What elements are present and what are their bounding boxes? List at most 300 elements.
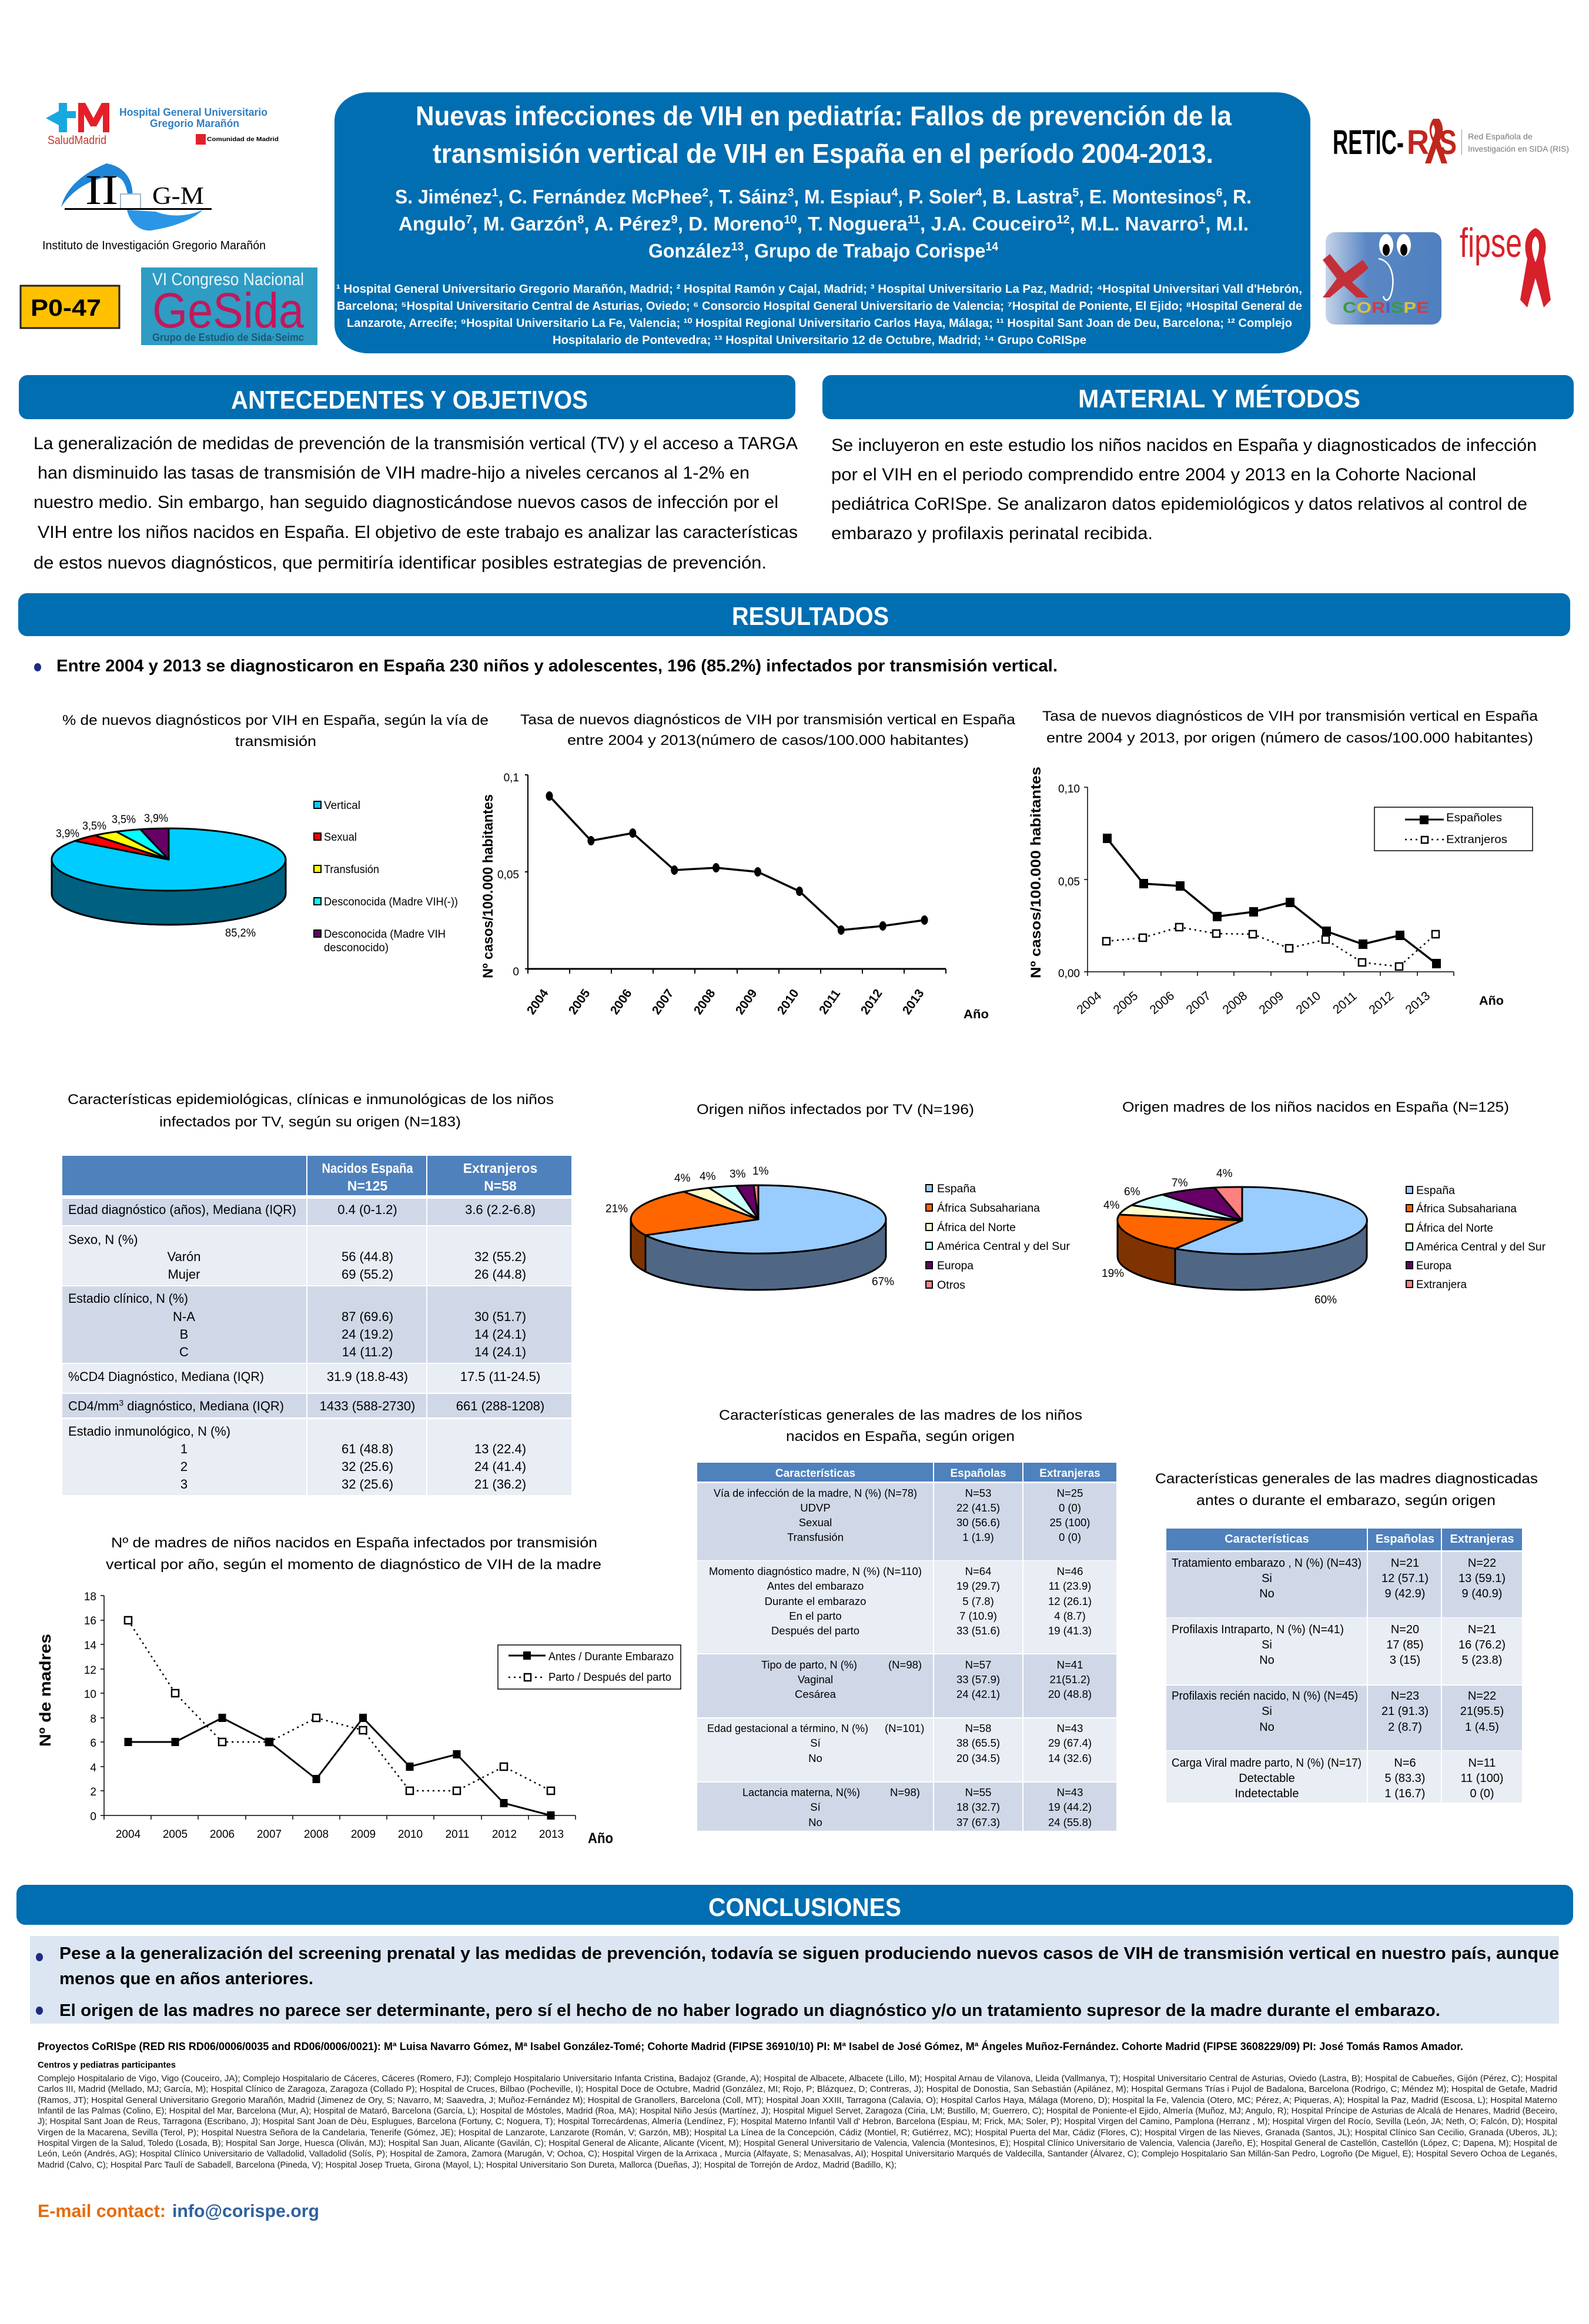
row: momento diagnóstico: 19 (41.3): [1048, 1624, 1092, 1637]
list of centres: Complejo Hospitalario de Vigo, Vigo (Couceiro, JA); Complejo Hospitalario de Cáceres, Cáceres (Romero, FJ); Complejo Hospitalario Universitario Infanta Cristina, Badajoz (Grande, A); Hospital de Albacete, Albacete (Lillo, M); Hospital Arnau de Vilanova, Lleida (Vallmanya, T); Hospital Universitario Central de Asturias, Oviedo (Lastra, B); Hospital de Cabueñes, Gijón (Pérez, C); Hospital: [38, 2074, 1557, 2084]
row: profilaxis intraparto: No: [1259, 1654, 1274, 1667]
table title: Características generales de las madres diagnosticadas: [1155, 1471, 1538, 1487]
row: lactancia materna: 18 (32.7): [956, 1801, 1000, 1813]
authors: 7: [466, 213, 472, 226]
x axis labels: 2009: [733, 987, 760, 1017]
row: tipo de parto: Cesárea: [795, 1688, 837, 1700]
row: momento diagnóstico: 4 (8.7): [1054, 1610, 1086, 1622]
row: profilaxis recién nacido: 2 (8.7): [1388, 1721, 1422, 1734]
row: profilaxis intraparto: 3 (15): [1390, 1654, 1420, 1667]
row: CD4/mm3: CD4/mm: [68, 1399, 119, 1413]
x axis labels: 2004: [116, 1828, 141, 1841]
row: momento diagnóstico: Durante el embarazo: [765, 1595, 866, 1607]
logo: Instituto de Investigación Gregorio Marañón: [42, 163, 266, 252]
table header: Extranjeras: [1450, 1533, 1514, 1546]
row: tipo de parto: 24 (42.1): [956, 1688, 1000, 1700]
logo: Hospital Gregorio Marañón: Comunidad de Madrid: [207, 136, 279, 143]
row: sexo: [62, 1226, 571, 1285]
x axis labels: 2008: [1220, 989, 1250, 1017]
pie value labels: 19%: [1102, 1268, 1124, 1280]
row: tipo de parto: 33 (57.9): [956, 1673, 1000, 1686]
x axis labels: 2007: [257, 1828, 282, 1841]
row: momento diagnóstico: 19 (29.7): [956, 1580, 1000, 1592]
authors: , T. Sáinz: [708, 186, 788, 208]
table: características de los niños: [62, 1092, 571, 1495]
y axis labels: 6: [90, 1737, 96, 1750]
row: tratamiento embarazo: 9 (40.9): [1462, 1587, 1502, 1600]
row: edad diagnóstico: 3.6 (2.2-6.8): [465, 1202, 536, 1217]
text block: antecedentes: VIH entre los niños nacidos en España. El objetivo de este trabajo es analizar las características: [38, 523, 798, 542]
row: vía de infección: 1 (1.9): [962, 1531, 994, 1543]
text block: antecedentes: han disminuido las tasas de transmisión de VIH madre-hijo a niveles cercanos al 1-2% en: [38, 463, 750, 483]
table title: Características epidemiológicas, clínicas e inmunológicas de los niños: [68, 1092, 554, 1108]
section heading: Material y métodos: MATERIAL Y MÉTODOS: [1078, 384, 1360, 413]
row: vía de infección: 22 (41.5): [956, 1502, 1000, 1514]
x axis labels: 2006: [210, 1828, 235, 1841]
row: vía de infección: [697, 1483, 1116, 1560]
authors: 14: [985, 240, 999, 253]
series: Antes / Durante Embarazo: [125, 1714, 555, 1820]
row: CD4/mm3: 3: [119, 1398, 123, 1407]
row: lactancia materna: 24 (55.8): [1048, 1816, 1092, 1828]
table title: antes o durante el embarazo, según origen: [1196, 1493, 1496, 1509]
authors: , P. Soler: [898, 186, 976, 208]
x axis labels: 2008: [691, 987, 718, 1017]
table header: [62, 1156, 571, 1195]
row: carga viral: Indetectable: [1235, 1787, 1299, 1800]
row: sexo: 32 (55.2): [474, 1249, 526, 1264]
text block: antecedentes: de estos nuevos diagnósticos, que permitiría identificar posibles estrategias de prevención.: [34, 553, 767, 573]
contact e-mail: E-mail contact:: [38, 2201, 166, 2221]
row: sexo: 56 (44.8): [342, 1249, 393, 1264]
row: momento diagnóstico: 11 (23.9): [1049, 1580, 1091, 1592]
chart title: transmisión: [235, 734, 316, 750]
x axis labels: [116, 1828, 564, 1841]
row: sexo: Mujer: [168, 1267, 200, 1282]
row: tratamiento embarazo: Tratamiento embarazo , N (%) (N=43): [1172, 1557, 1361, 1570]
row: profilaxis recién nacido: Profilaxis recién nacido, N (%) (N=45): [1172, 1690, 1358, 1703]
row: estadio inmunológico: 1: [180, 1442, 188, 1456]
logo: Hospital Gregorio Marañón: Hospital General Universitario: [119, 106, 267, 118]
chart title: entre 2004 y 2013, por origen (número de casos/100.000 habitantes): [1046, 730, 1533, 746]
row: estadio clínico: [62, 1286, 571, 1363]
table title: [1155, 1471, 1538, 1509]
row: profilaxis intraparto: Profilaxis Intraparto, N (%) (N=41): [1172, 1623, 1344, 1636]
list of centres: (Ramos, JT); Hospital General Universitario Gregorio Marañón, Madrid (Jimenez de Ory, S; Navarro, M; Saavedra, J; Muñoz-Fernández M); Hospital de Granollers, Barcelona (Coll, MT); Hospital Joan XXIII, Tarragona (Calavia, O); Hospital Carlos Haya, Málaga (Moreno, D); Hospital la Fe, Valencia (Otero, MC; Pérez, A; Piqueras, A); Hospital la Paz, Madrid (Escosa, L); Hospital Materno: [38, 2095, 1557, 2105]
row: tratamiento embarazo: [1166, 1552, 1522, 1617]
pie value labels: 4%: [1103, 1199, 1120, 1212]
row: carga viral: 0 (0): [1470, 1787, 1494, 1800]
y axis labels: 0: [90, 1811, 96, 1823]
poster code badge: [21, 286, 119, 328]
logo: CoRISpe: [1323, 232, 1441, 325]
row: estadio inmunológico: 61 (48.8): [342, 1442, 393, 1456]
row: porcentaje CD4: %CD4 Diagnóstico, Mediana (IQR): [68, 1369, 264, 1384]
pie legend: América Central y del Sur: [1416, 1241, 1546, 1253]
list of centres: J); Hospital Sant Joan de Reus, Tarragona (Escribano, J); Hospital Sant Joan de Dèu, Esplugues, Barcelona (Fortuny, C; Noguera, T); Hospital Torrecárdenas, Almería (Lendínez, F); Hospital Materno Infantil Vall d' Hebron, Barcelona (Espiau, M; Frick, MA; Soler, P); Hospital Virgen del Camino, Pamplona (Herranz , M); Hospital Virgen del Rocío, Sevilla (León, JA; Neth, O; Falcón, D); Hospital: [38, 2116, 1557, 2126]
x axis labels: [524, 987, 926, 1017]
pie legend: Transfusión: [324, 864, 379, 876]
pie legend: España: [1416, 1185, 1455, 1197]
pie legend: África Subsahariana: [1416, 1203, 1517, 1215]
panel: conclusiones: [30, 1936, 1559, 2024]
y axis labels: 16: [84, 1615, 96, 1627]
row: profilaxis intraparto: 17 (85): [1386, 1638, 1424, 1651]
x axis labels: 2006: [608, 987, 634, 1017]
conclusion 1: menos que en años anteriores.: [59, 1969, 313, 1988]
row: edad gestacional: Edad gestacional a término, N (%): [707, 1722, 868, 1734]
row: momento diagnóstico: N=64: [965, 1565, 991, 1577]
logo: RETIC-RIS: [1333, 119, 1569, 163]
row: profilaxis recién nacido: Si: [1262, 1705, 1272, 1718]
pie chart: vía de transmisión: [52, 713, 489, 954]
row: profilaxis recién nacido: 1 (4.5): [1465, 1721, 1499, 1734]
logo: fipse: fipse: [1460, 220, 1522, 266]
row: tratamiento embarazo: 13 (59.1): [1458, 1572, 1506, 1585]
row: lactancia materna: Sí: [810, 1801, 821, 1813]
row: estadio inmunológico: 24 (41.4): [474, 1459, 526, 1474]
y axis labels: 0,00: [1058, 968, 1080, 980]
legend: Extranjeros: [1446, 834, 1507, 846]
y axis labels: 14: [84, 1640, 96, 1652]
row: vía de infección: N=53: [965, 1487, 991, 1499]
row: estadio clínico: Estadio clínico, N (%): [68, 1291, 188, 1306]
row: sexo: Varón: [167, 1249, 201, 1264]
x axis labels: 2013: [539, 1828, 564, 1841]
x axis labels: 2013: [1403, 989, 1433, 1017]
list of centres: León, León (Andrés, AG); Hospital Clínico Universitario de Valladolid, Valladolid (Solís, P); Hospital de Zamora, Zamora (Marugán, V; Ochoa, C); Hospital Virgen de la Arrixaca , Murcia (Alfayate, S; Menasalvas, AI); Hospital Universitario Marqués de Valdecilla, Santander (Álvarez, C); Complejo Hospitalario San Millán-San Pedro, Logroño (De Miguel, E); Hospital Severo Ochoa de Leganés,: [38, 2149, 1557, 2159]
list of centres: Carlos III, Madrid (Mellado, MJ; García, M); Hospital Clínico de Zaragoza, Zaragoza (Collado P); Hospital de Cruces, Bilbao (Pocheville, I); Hospital Doce de Octubre, Madrid (González, MI; Rojo, P; Blázquez, D; Contreras, J); Hospital de Donostia, San Sebastián (Apilánez, M); Hospital Germans Trías i Pujol de Badalona, Barcelona (Rodrigo, C; Méndez M); Hospital de Getafe, Madrid: [38, 2084, 1557, 2094]
pie chart: origen madres: [1102, 1099, 1546, 1306]
pie value labels: 3,5%: [112, 814, 136, 826]
pie value labels: 21%: [606, 1203, 628, 1215]
authors: , J.A. Couceiro: [920, 213, 1056, 235]
row: tipo de parto: N=57: [965, 1658, 991, 1671]
pie value labels: 6%: [1124, 1186, 1140, 1198]
axes: [525, 775, 946, 974]
row: momento diagnóstico: Momento diagnóstico madre, N (%) (N=110): [709, 1565, 922, 1577]
legend: Españoles: [1446, 812, 1502, 824]
affiliations: [336, 283, 1302, 347]
section heading: Antecedentes y objetivos: ANTECEDENTES Y OBJETIVOS: [231, 386, 588, 414]
text block: material y métodos: embarazo y profilaxis perinatal recibida.: [831, 524, 1153, 543]
row: momento diagnóstico: N=46: [1057, 1565, 1083, 1577]
logo: RETIC-RIS: RETIC-: [1333, 123, 1404, 162]
authors: , B. Lastra: [982, 186, 1073, 208]
row: edad diagnóstico: 0.4 (0-1.2): [337, 1202, 397, 1217]
row: carga viral: 11 (100): [1460, 1772, 1504, 1785]
series: Extranjeros: [1103, 924, 1439, 970]
logo: Hospital Gregorio Marañón: SaludMadrid: [48, 134, 106, 147]
row: momento diagnóstico: 7 (10.9): [959, 1610, 997, 1622]
table header: Extranjeros: [463, 1161, 537, 1176]
x axis labels: 2005: [1111, 989, 1140, 1017]
pie value labels: [56, 812, 256, 939]
row: tratamiento embarazo: 12 (57.1): [1381, 1572, 1429, 1585]
pie legend: Vertical: [324, 800, 360, 812]
participating centres: Centros y pediatras participantes: [38, 2060, 176, 2070]
authors: 5: [1072, 186, 1079, 199]
authors: S. Jiménez: [395, 186, 496, 208]
authors: , A. Pérez: [584, 213, 671, 235]
funding line: Proyectos CoRISpe (RED RIS RD06/0006/0035 and RD06/0006/0021): Mª Luisa Navarro Gómez, Mª Isabel González-Tomé; Cohorte Madrid (FIPSE 36910/10) PI: Mª Isabel de José Gómez, Mª Ángeles Muñoz-Fernández. Cohorte Madrid (FIPSE 3608229/09) PI: José Tomás Ramos Amador.: [38, 2040, 1463, 2052]
y axis labels: 18: [84, 1591, 96, 1603]
row: vía de infección: 25 (100): [1050, 1516, 1090, 1529]
row: edad gestacional: 29 (67.4): [1048, 1737, 1092, 1749]
row: profilaxis intraparto: 5 (23.8): [1462, 1654, 1502, 1667]
authors: 8: [577, 213, 584, 226]
section heading: Resultados: [18, 593, 1570, 636]
text block: material y métodos: Se incluyeron en este estudio los niños nacidos en España y diagnosticados de infección: [831, 436, 1537, 455]
authors: , M. Espiau: [794, 186, 892, 208]
pie value labels: 3,9%: [56, 828, 79, 840]
logo: VI Congreso Nacional GeSida: VI Congreso Nacional: [152, 270, 304, 289]
y axis labels: 0,10: [1058, 783, 1080, 795]
pie legend: África Subsahariana: [937, 1202, 1040, 1215]
pie legend: Sexual: [324, 831, 357, 844]
section heading: Conclusiones: [16, 1885, 1573, 1925]
pie legend: Otros: [937, 1279, 965, 1292]
row: tipo de parto: N=41: [1057, 1658, 1083, 1671]
pie legend: Europa: [937, 1260, 974, 1272]
row: sexo: 69 (55.2): [342, 1267, 393, 1282]
row: estadio clínico: 24 (19.2): [342, 1327, 393, 1342]
table header: Españolas: [1376, 1533, 1434, 1546]
y axis labels: 0,05: [497, 869, 519, 881]
row: edad gestacional: 14 (32.6): [1048, 1752, 1092, 1764]
x axis labels: 2004: [1075, 989, 1104, 1017]
row: carga viral: 5 (83.3): [1385, 1772, 1425, 1785]
x axis labels: 2010: [1294, 989, 1323, 1017]
pie value labels: 60%: [1314, 1294, 1337, 1306]
authors: , E. Montesinos: [1079, 186, 1216, 208]
pie slices: [1118, 1187, 1367, 1290]
section heading: Resultados: RESULTADOS: [732, 602, 889, 631]
pie legend: América Central y del Sur: [937, 1240, 1071, 1253]
legend: [498, 1645, 681, 1689]
row: edad gestacional: 38 (65.5): [956, 1737, 1000, 1749]
x axis labels: 2011: [1330, 989, 1360, 1016]
contact e-mail: info@corispe.org: [172, 2201, 319, 2221]
row: estadio inmunológico: 21 (36.2): [474, 1477, 526, 1492]
pie legend: Desconocida (Madre VIH(-)): [324, 896, 458, 908]
text block: material y métodos: pediátrica CoRISpe. Se analizaron datos epidemiológicos y datos relativos al control de: [831, 494, 1527, 514]
pie value labels: 4%: [1216, 1168, 1233, 1180]
affiliations: Hospitalario de Pontevedra; ¹³ Hospital Universitario 12 de Octubre, Madrid; ¹⁴ Grupo CoRISpe: [553, 334, 1086, 347]
logo: Hospital Gregorio Marañón: [46, 103, 279, 147]
row: tipo de parto: 20 (48.8): [1048, 1688, 1092, 1700]
x axis labels: 2004: [524, 987, 551, 1017]
x axis labels: 2012: [858, 987, 885, 1017]
pie value labels: [1102, 1168, 1337, 1306]
row: estadio clínico: N-A: [173, 1309, 195, 1324]
header panel: title, authors, affiliations: [334, 92, 1310, 353]
chart title: [106, 1535, 601, 1573]
row: carga viral: 1 (16.7): [1385, 1787, 1425, 1800]
contact e-mail: [38, 2201, 319, 2221]
x axis labels: 2013: [900, 987, 926, 1017]
y axis labels: 0: [513, 966, 519, 978]
row: estadio clínico: 30 (51.7): [474, 1309, 526, 1324]
list of centres: Hospital Virgen de la Salud, Toledo (Losada, B); Hospital San Jorge, Huesca (Oliván, MJ); Hospital San Juan, Alicante (Gavilán, C); Hospital General de Alicante, Alicante (Vicent, M); Hospital General Universitario de Valencia, Valencia (Montesinos, E); Hospital Clínico Universitario de Valencia, Valencia (Jareño, E); Hospital General de Castellón, Castellón (López, C; Dapena, M); Hospital de: [38, 2138, 1557, 2148]
logo: Instituto de Investigación Gregorio Marañón: Instituto de Investigación Gregorio Marañón: [42, 239, 266, 252]
table header: N=58: [484, 1178, 517, 1193]
y axis labels: 10: [84, 1688, 96, 1701]
y axis title: Nº casos/100.000 habitantes: [480, 794, 496, 978]
y axis labels: 0,05: [1058, 876, 1080, 888]
affiliations: Lanzarote, Arrecife; ⁹Hospital Universitario La Fe, Valencia; ¹⁰ Hospital Regional Universitario Carlos Haya, Málaga; ¹¹ Hospital Sant Joan de Deu, Barcelona; ¹² Complejo: [347, 317, 1292, 330]
pie slices: [631, 1185, 886, 1290]
x axis labels: 2005: [566, 987, 593, 1017]
series: Españoles: [1103, 834, 1441, 968]
y axis labels: 2: [90, 1786, 96, 1798]
row: tratamiento embarazo: No: [1259, 1587, 1274, 1600]
logo: RETIC-RIS: R: [1407, 123, 1429, 162]
logo: CoRISpe: CORISPE: [1343, 299, 1429, 316]
pie legend: Desconocida (Madre VIH: [324, 928, 446, 941]
y axis labels: 8: [90, 1713, 96, 1726]
row: edad gestacional: Sí: [810, 1737, 821, 1749]
row: lactancia materna: N=55: [965, 1786, 991, 1798]
table title: [68, 1092, 554, 1130]
authors: González: [648, 240, 734, 262]
pie chart: origen niños: [606, 1102, 1071, 1292]
row: tratamiento embarazo: N=21: [1391, 1557, 1419, 1570]
title: transmisión vertical de VIH en España en el período 2004-2013.: [433, 138, 1213, 169]
x axis labels: [1075, 989, 1433, 1017]
text block: material y métodos: por el VIH en el periodo comprendido entre 2004 y 2013 en la Cohorte Nacional: [831, 465, 1476, 484]
logo: RETIC-RIS: S: [1439, 123, 1457, 162]
row: sexo: Sexo, N (%): [68, 1232, 138, 1247]
row: porcentaje CD4: [62, 1364, 571, 1393]
x axis labels: 2012: [1367, 989, 1396, 1017]
logo: fipse: [1460, 220, 1551, 307]
row: carga viral: N=6: [1394, 1757, 1416, 1770]
authors: , R.: [1222, 186, 1252, 208]
row: momento diagnóstico: 5 (7.8): [962, 1595, 994, 1607]
y axis labels: [84, 1591, 96, 1823]
logo: VI Congreso Nacional GeSida: Grupo de Estudio de Sida·Seimc: [152, 332, 304, 343]
row: edad diagnóstico: Edad diagnóstico (años), Mediana (IQR): [68, 1202, 296, 1217]
row: estadio clínico: C: [179, 1345, 189, 1359]
logo: RETIC-RIS: Red Española de: [1468, 132, 1533, 141]
x axis title: Año: [588, 1830, 613, 1847]
table header: Características: [775, 1467, 855, 1480]
row: vía de infección: Sexual: [799, 1516, 832, 1529]
authors: , M.I.: [1205, 213, 1249, 235]
row: tratamiento embarazo: Si: [1262, 1572, 1272, 1585]
x axis title: Año: [1479, 994, 1504, 1008]
row: CD4/mm3: 1433 (588-2730): [320, 1399, 415, 1413]
pie legend: África del Norte: [937, 1222, 1016, 1234]
legend: [1374, 807, 1533, 851]
table header: [1166, 1529, 1522, 1550]
row: carga viral: Detectable: [1239, 1772, 1295, 1785]
row: estadio inmunológico: 2: [180, 1459, 188, 1474]
row: vía de infección: Vía de infección de la madre, N (%) (N=78): [714, 1487, 917, 1499]
row: CD4/mm3: [62, 1394, 571, 1417]
chart title: Origen niños infectados por TV (N=196): [697, 1102, 974, 1118]
affiliations: ¹ Hospital General Universitario Gregorio Marañón, Madrid; ² Hospital Ramón y Cajal, Madrid; ³ Hospital Universitario La Paz, Madrid; ⁴Hospital Universitari Vall d'Hebrón,: [336, 283, 1302, 296]
table header: [697, 1463, 1116, 1482]
pie legend: África del Norte: [1416, 1222, 1493, 1235]
row: edad diagnóstico: [62, 1199, 571, 1225]
x axis labels: 2007: [650, 987, 676, 1017]
conclusion 1: Pese a la generalización del screening prenatal y las medidas de prevención, todavía se siguen produciendo nuevos casos de VIH de transmisión vertical en nuestro país, aunque: [59, 1944, 1559, 1963]
y axis labels: 0,1: [504, 772, 519, 784]
row: profilaxis intraparto: [1166, 1618, 1522, 1684]
x axis title: Año: [964, 1008, 989, 1021]
pie legend: Extranjera: [1416, 1279, 1467, 1291]
row: profilaxis recién nacido: 21 (91.3): [1381, 1705, 1429, 1718]
table header: Españolas: [950, 1467, 1006, 1480]
data line: [549, 796, 925, 930]
authors: , T. Noguera: [797, 213, 908, 235]
text block: antecedentes: nuestro medio. Sin embargo, han seguido diagnosticándose nuevos casos de infección por el: [34, 493, 778, 512]
pie value labels: 1%: [752, 1165, 769, 1178]
row: vía de infección: N=25: [1057, 1487, 1083, 1499]
row: profilaxis intraparto: N=20: [1391, 1623, 1419, 1636]
row: estadio clínico: 87 (69.6): [342, 1309, 393, 1324]
row: lactancia materna: No: [808, 1816, 822, 1828]
y axis labels: 12: [84, 1664, 96, 1677]
authors: 3: [788, 186, 794, 199]
chart title: vertical por año, según el momento de diagnóstico de VIH de la madre: [106, 1557, 601, 1573]
authors: , Grupo de Trabajo Corispe: [744, 240, 985, 262]
row: vía de infección: 30 (56.6): [956, 1516, 1000, 1529]
row: tipo de parto: [697, 1654, 1116, 1717]
section heading: Material y métodos: [822, 375, 1574, 419]
row: profilaxis intraparto: 16 (76.2): [1458, 1638, 1506, 1651]
table header: N=125: [347, 1178, 387, 1193]
row: edad gestacional: [697, 1718, 1116, 1781]
series: Parto / Después del parto: [125, 1617, 554, 1794]
row: tratamiento embarazo: 9 (42.9): [1385, 1587, 1425, 1600]
row: lactancia materna: Lactancia materna, N(%): [742, 1786, 860, 1798]
x axis labels: 2005: [163, 1828, 188, 1841]
list of centres: [38, 2074, 1557, 2170]
row: profilaxis recién nacido: 21(95.5): [1460, 1705, 1504, 1718]
pie value labels: 4%: [674, 1172, 691, 1185]
row: tipo de parto: Tipo de parto, N (%): [761, 1658, 857, 1671]
row: estadio inmunológico: 32 (25.6): [342, 1477, 393, 1492]
x axis labels: 2010: [398, 1828, 423, 1841]
table title: nacidos en España, según origen: [786, 1429, 1015, 1444]
row: momento diagnóstico: Antes del embarazo: [767, 1580, 864, 1592]
pie value labels: 85,2%: [225, 927, 256, 939]
logo: VI Congreso Nacional GeSida: GeSida: [152, 283, 304, 338]
line chart: tasa de nuevos diagnósticos: [480, 712, 1016, 1021]
authors: 4: [976, 186, 982, 199]
poster code badge: P0-47: [31, 295, 101, 321]
x axis labels: 2010: [775, 987, 801, 1017]
authors: , M. Garzón: [472, 213, 577, 235]
pie value labels: 4%: [700, 1171, 716, 1183]
row: lactancia materna: 37 (67.3): [956, 1816, 1000, 1828]
x axis labels: 2009: [1257, 989, 1286, 1017]
section heading: Conclusiones: CONCLUSIONES: [708, 1893, 901, 1922]
row: tipo de parto: 21(51.2): [1050, 1673, 1090, 1686]
row: edad gestacional: 20 (34.5): [956, 1752, 1000, 1764]
row: momento diagnóstico: [697, 1561, 1116, 1653]
row: edad gestacional: (N=101): [885, 1722, 924, 1734]
row: CD4/mm3: diagnóstico, Mediana (IQR): [123, 1399, 284, 1413]
title: Nuevas infecciones de VIH en pediatría: Fallos de prevención de la: [416, 101, 1232, 131]
table: madres diagnosticadas antes o durante el embarazo: [1155, 1471, 1538, 1803]
table title: infectados por TV, según su origen (N=183): [159, 1114, 461, 1130]
table title: Características generales de las madres de los niños: [719, 1407, 1082, 1423]
pie value labels: 3%: [730, 1168, 746, 1181]
